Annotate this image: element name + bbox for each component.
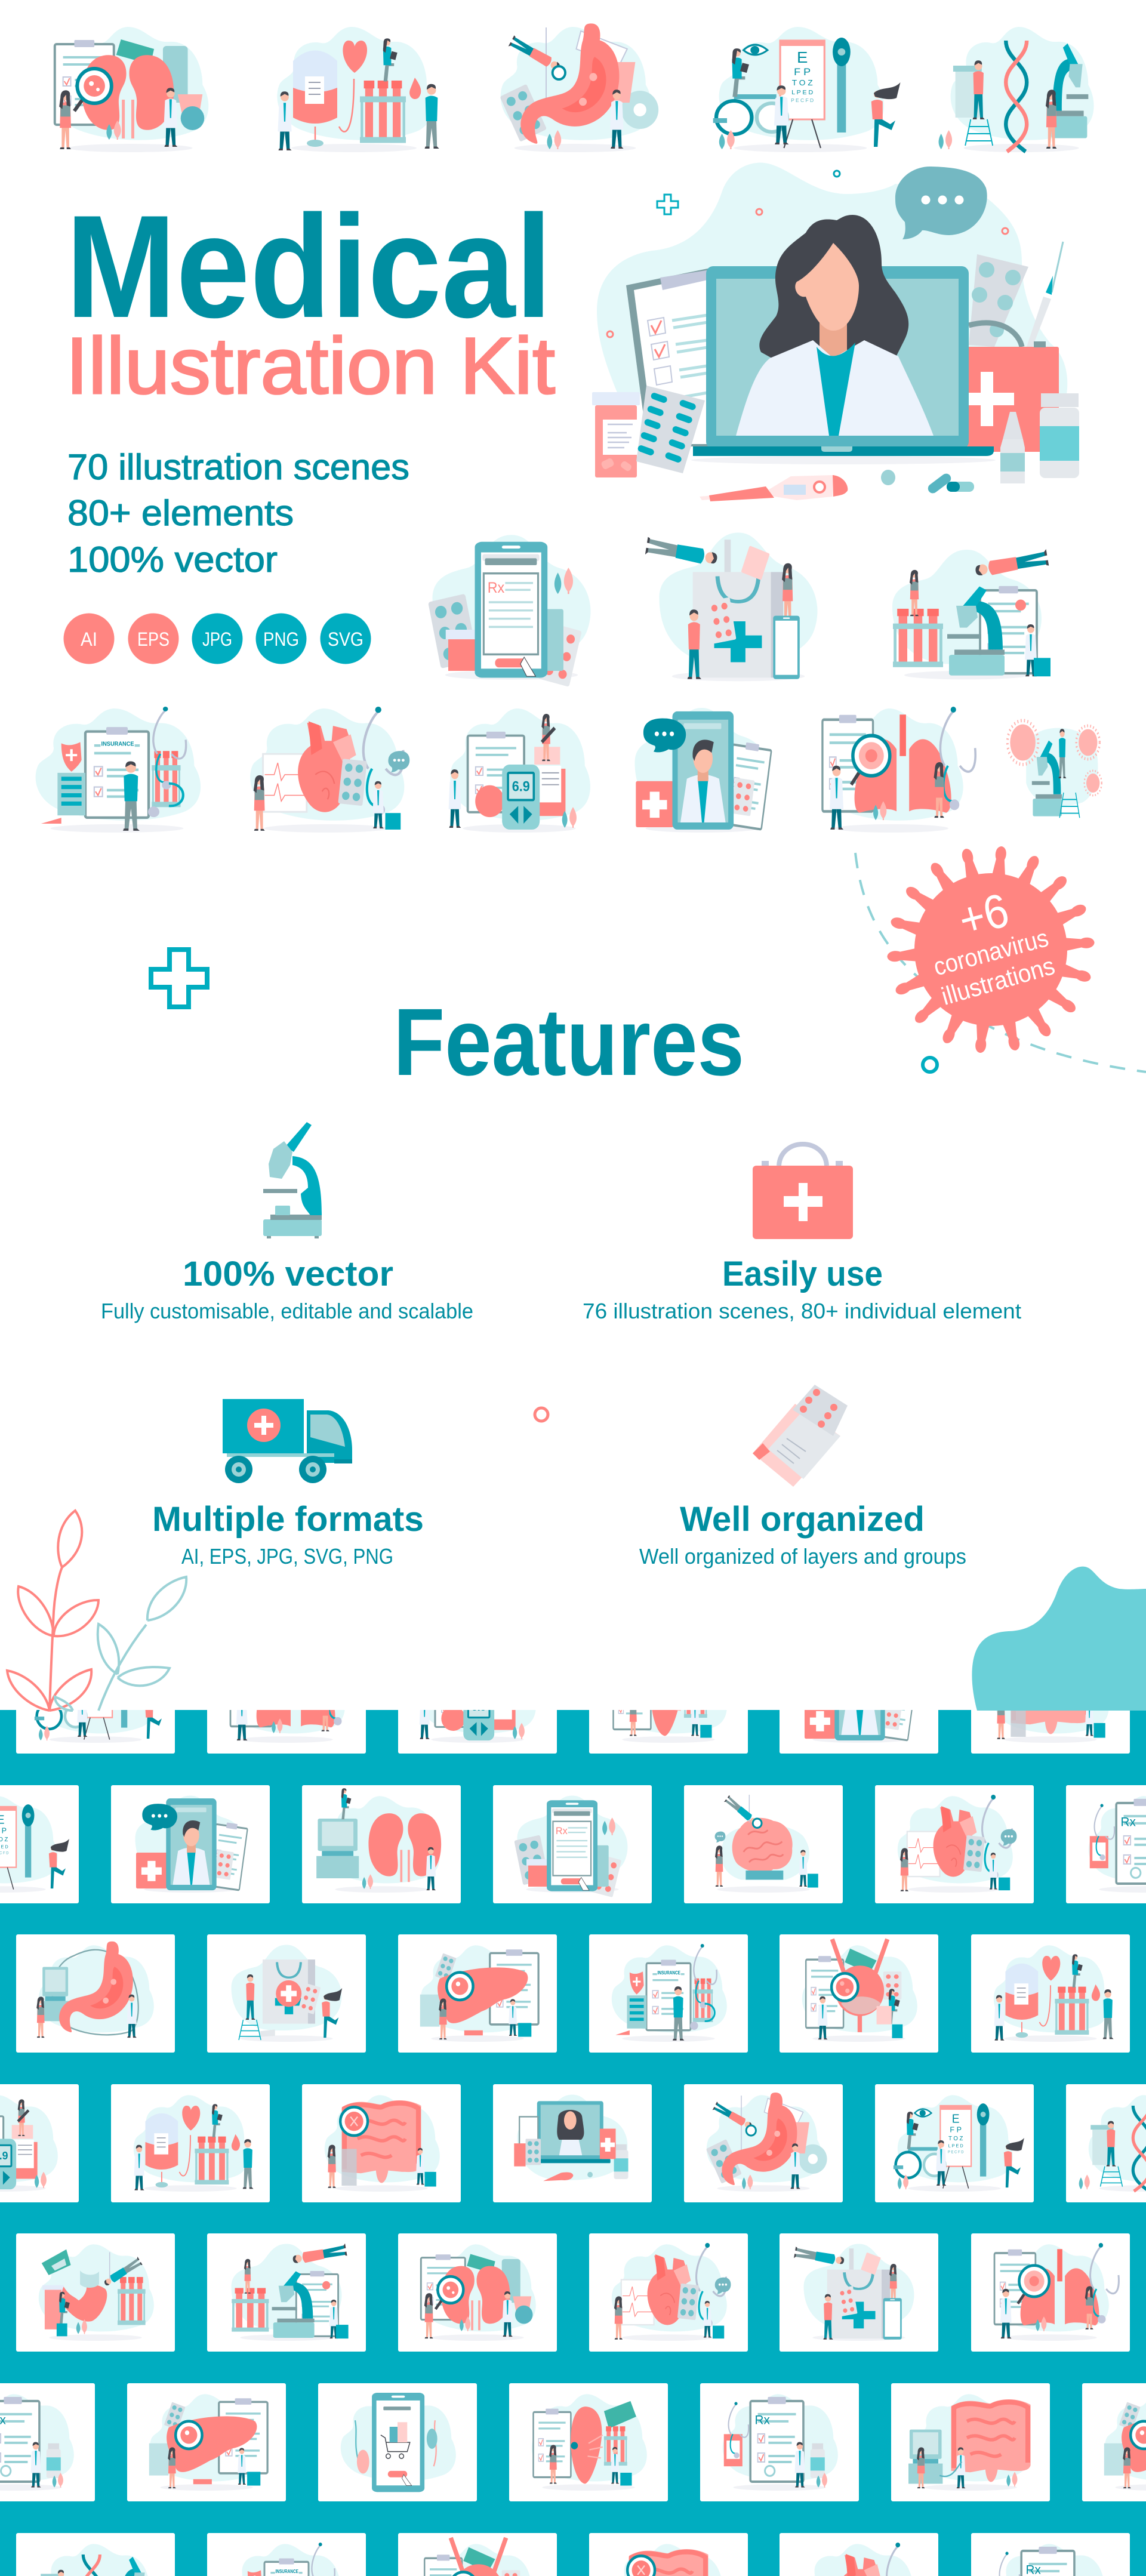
clipboard checklist [626,268,710,446]
stats text block [67,447,409,580]
ring: coral [535,1408,548,1421]
dashed curve [855,853,1146,1072]
description: easily use: 76 illustration scenes, 80+ individual element [583,1299,1021,1323]
ring: teal [923,1058,937,1072]
card row 7 [16,2533,1130,2576]
thermometer [700,475,848,501]
icon: pill box [753,1385,848,1487]
gray blister pack [969,254,1028,347]
card row 5 [16,2233,1130,2352]
second row illustrations [36,707,1102,833]
white panel above card pattern [0,1611,1146,1710]
stats text block: 80+ elements [67,493,294,533]
top row illustrations [54,23,1094,152]
mid row illustrations [428,532,1050,687]
hero illustration: online doctor [592,163,1079,501]
format badges [63,614,371,664]
small dropper bottle [1000,412,1025,483]
icon: medkit [753,1144,853,1239]
subtitle: Illustration Kit: Illustration Kit [66,322,555,411]
description: formats: AI, EPS, JPG, SVG, PNG [181,1544,393,1569]
heading: Multiple formats: Multiple formats [152,1500,424,1539]
medkit [957,341,1059,452]
title: Medical: Medical [66,184,552,348]
icon: ambulance truck [223,1399,352,1483]
coronavirus badge [887,846,1095,1053]
stethoscope arc [969,323,1022,347]
heading: Features: Features [393,988,744,1095]
stats text block: 100% vector [67,540,278,580]
coronavirus badge: +6 [953,883,1014,947]
description: vector: Fully customisable, editable and scalable [101,1299,473,1323]
format badges: SVG [328,628,363,650]
syringe [1027,242,1063,347]
heading: 100% vector: 100% vector [183,1255,393,1293]
card row 2 [0,1785,1146,1903]
teal blob [972,1567,1146,1711]
loose pills [881,470,974,495]
pattern section: illustration cards [0,1635,1146,2576]
coronavirus badge: coronavirus [931,923,1051,981]
card row 4 [0,2084,1146,2202]
format badges: EPS [137,628,170,650]
card row 6 [0,2383,1146,2501]
format badges: PNG [263,628,299,650]
format badges: JPG [202,628,232,650]
laptop [693,266,994,456]
description: organized: Well organized of layers and groups [639,1544,966,1569]
doctor portrait [736,215,934,436]
coronavirus badge: illustrations [938,951,1058,1010]
decorative rings [607,171,1008,337]
heading: Well organized: Well organized [680,1500,925,1539]
decorative leaves [7,1511,186,1711]
capsule blister pack [636,386,705,473]
pill bottle [592,392,640,477]
card row 3 [16,1934,1130,2053]
heading: Easily use: Easily use [722,1255,883,1293]
card row 1 [16,1635,1130,1754]
icon: outline plus [657,195,678,214]
icon: large outline plus [151,950,207,1007]
stats text block: 70 illustration scenes [67,447,409,487]
speech bubble [895,167,987,239]
icon: microscope [263,1122,322,1238]
big bottle [1040,393,1079,478]
format badges: AI [81,628,97,650]
